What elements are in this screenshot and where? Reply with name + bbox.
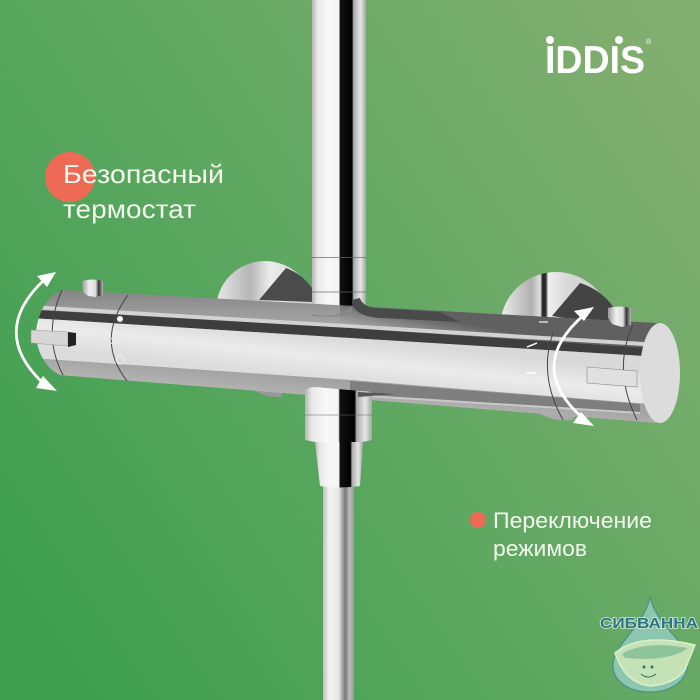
callout: mode switching — [470, 508, 652, 561]
thermostat body — [30, 290, 680, 423]
lower grey band — [43, 359, 656, 423]
watermark logo: Sibvanna — [600, 597, 698, 692]
tub face — [641, 666, 656, 677]
dark band — [30, 310, 660, 357]
callout: safe thermostat: термостат — [63, 194, 196, 224]
callout: mode switching: Переключение — [493, 508, 652, 533]
callout: safe thermostat: Безопасный — [63, 159, 224, 189]
top pipe — [312, 0, 366, 314]
logo: IDDIS: IDDIS — [545, 39, 645, 82]
knob right — [608, 306, 631, 327]
light stripe above band — [30, 305, 660, 347]
right handle tab — [587, 367, 637, 387]
pipe connection to body — [312, 298, 460, 322]
main light band — [30, 318, 660, 405]
tub rim — [622, 645, 688, 659]
right end cap — [640, 323, 680, 423]
mode marks — [526, 372, 536, 374]
bathtub — [615, 640, 695, 686]
thermostat body: 38° — [110, 336, 124, 346]
temperature marks — [117, 316, 123, 322]
left handle tab — [31, 330, 68, 346]
knob left — [82, 280, 103, 297]
wall disc left — [216, 261, 314, 397]
arrow: left rotation — [16, 272, 57, 391]
hose pipe — [323, 486, 354, 700]
callout: mode switching: режимов — [493, 536, 587, 561]
wall disc right — [500, 272, 614, 420]
brand name: СИБВАННА — [600, 615, 698, 632]
logo: IDDIS: ® — [646, 38, 652, 46]
water drop — [613, 597, 688, 692]
arrow: right rotation — [554, 307, 594, 426]
lower bracket — [305, 387, 395, 488]
callout: safe thermostat — [45, 152, 224, 224]
body seams — [52, 290, 637, 420]
